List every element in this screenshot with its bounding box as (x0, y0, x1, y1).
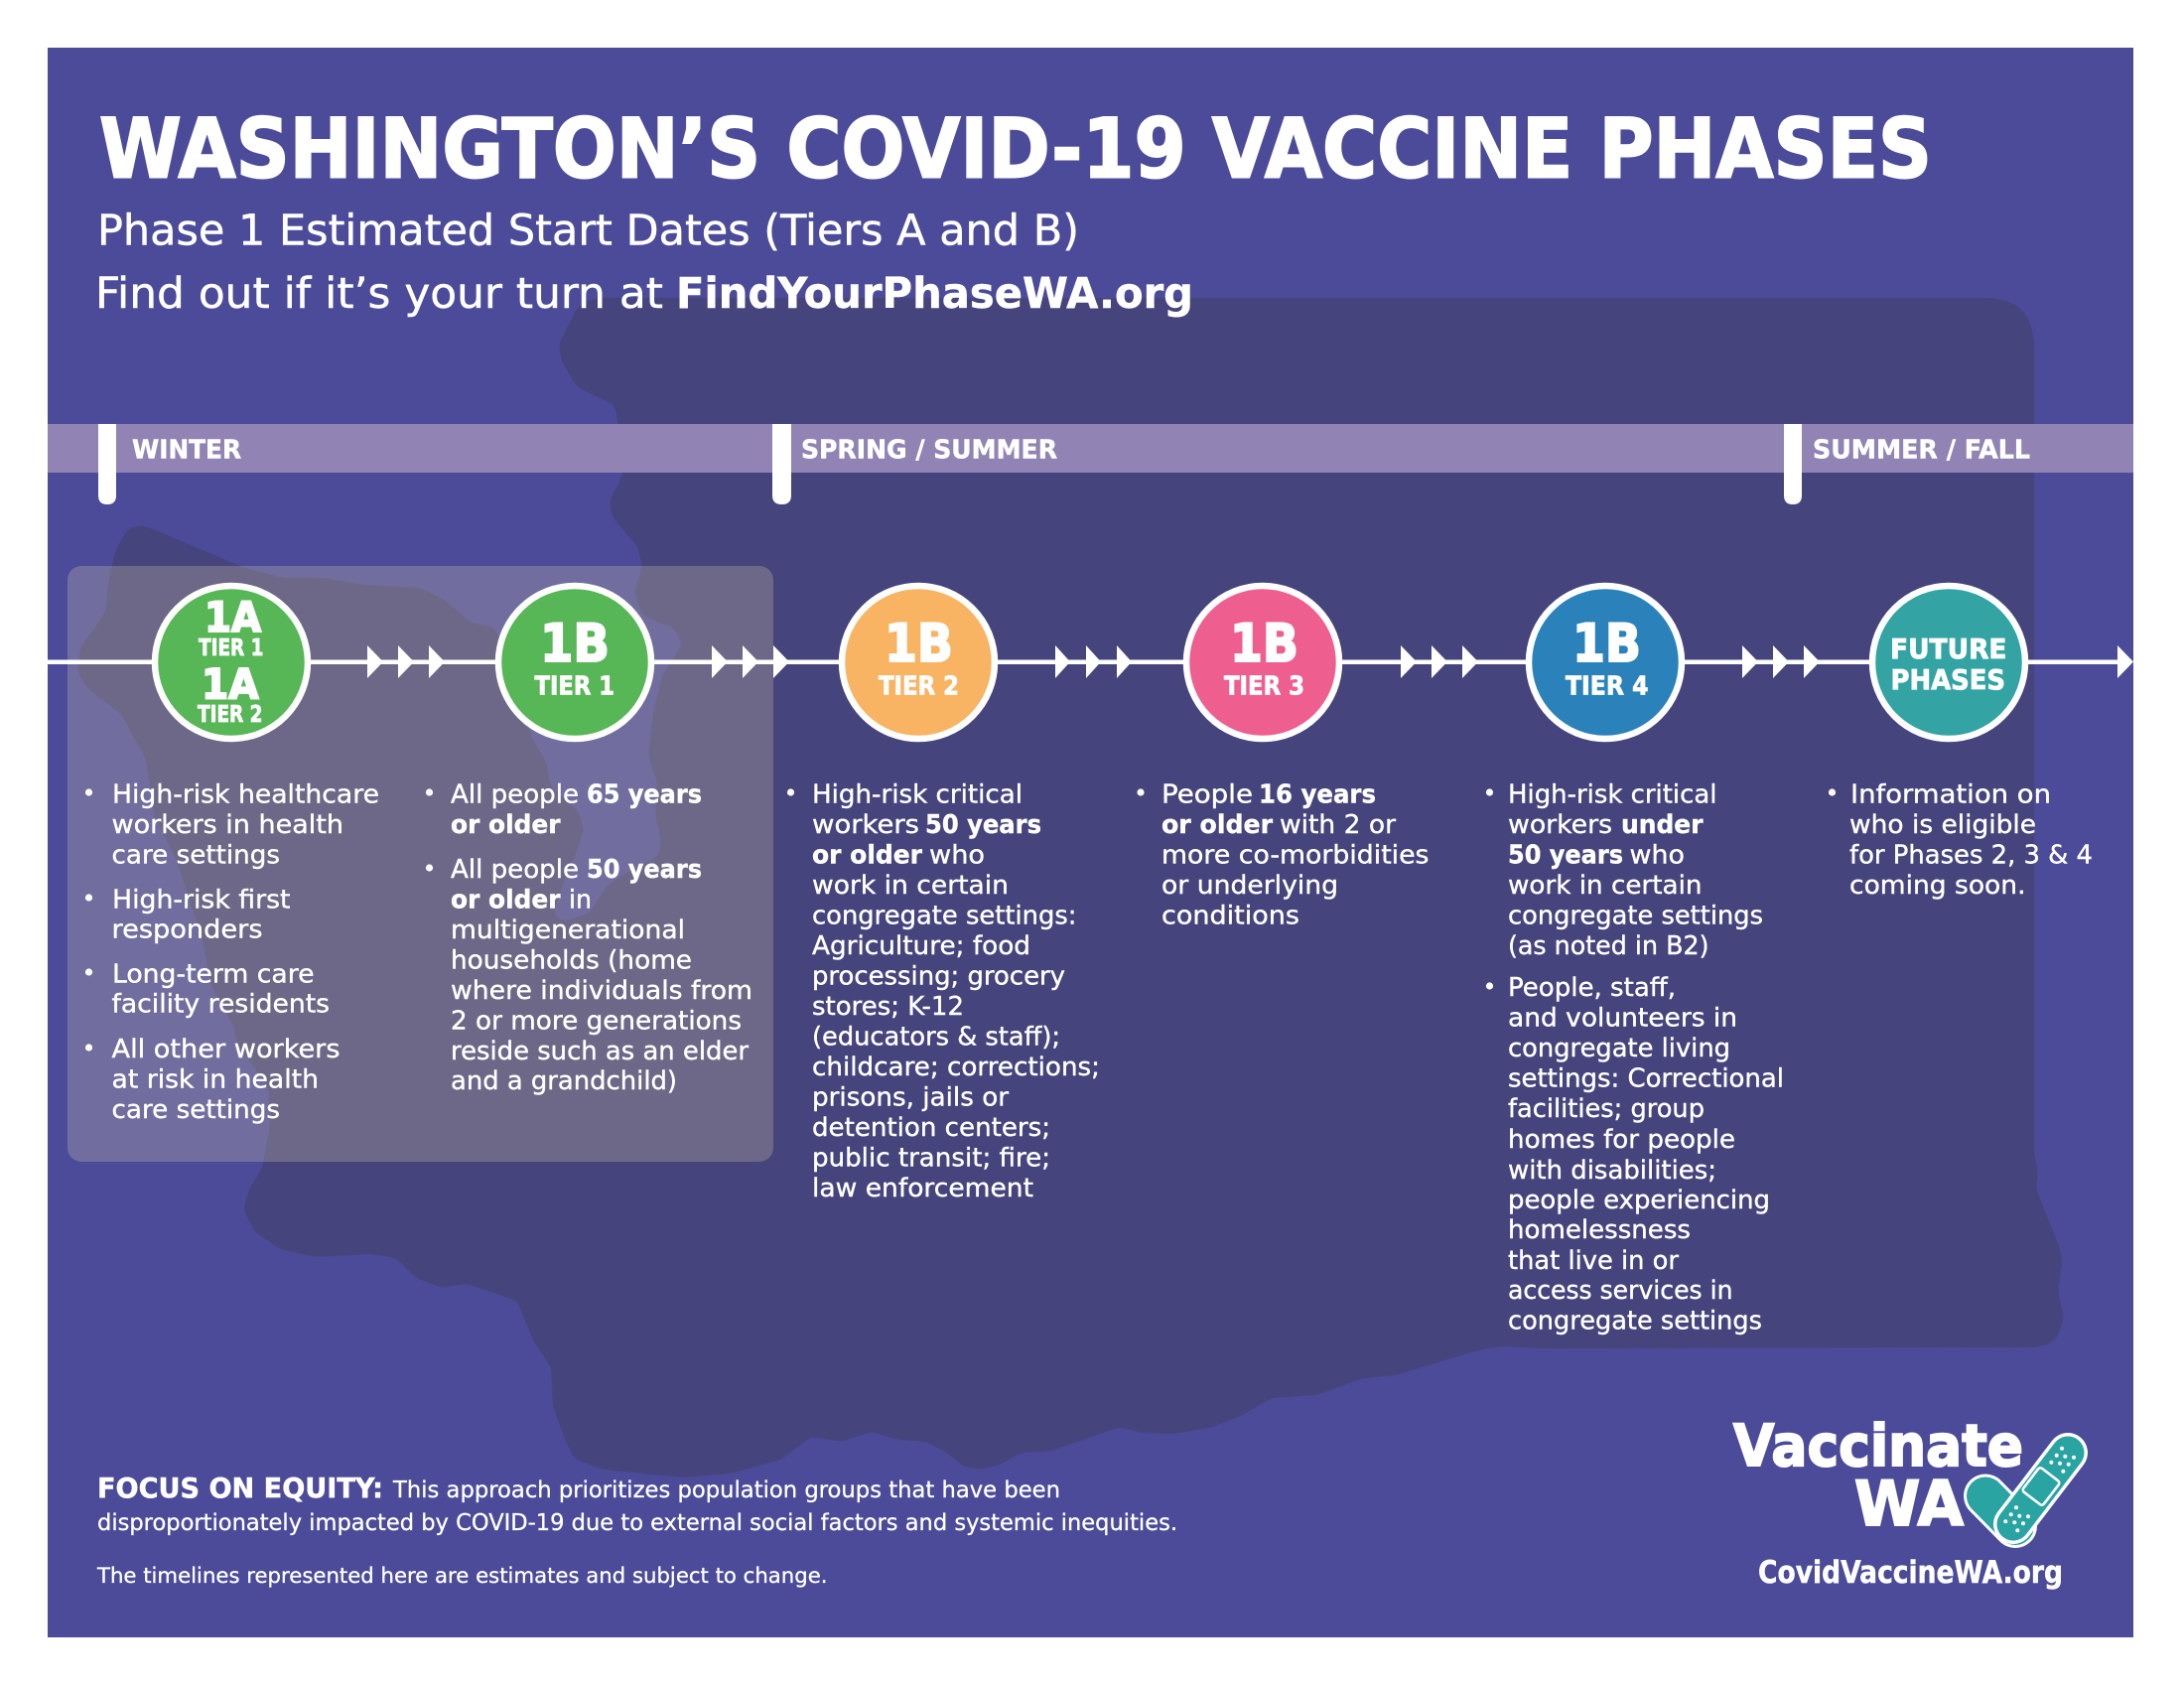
text block: 1B tier 1 eligibility: households (home (451, 945, 692, 975)
text block: 1B tier 1 eligibility: in (569, 886, 592, 915)
text block: 1A eligibility: High-risk healthcare (112, 780, 379, 810)
text block: 1A eligibility: care settings (111, 1095, 280, 1125)
logo: Vaccinate WA: WA (1854, 1468, 1964, 1540)
text block: 1B tier 1 eligibility: multigenerational (451, 915, 685, 945)
text block: 1B tier 3 eligibility: conditions (1161, 902, 1299, 931)
text block: 1B tier 1 eligibility: and a grandchild) (451, 1066, 677, 1096)
icon: bandage check mark (1985, 1447, 2076, 1532)
badge: 1B tier 3: TIER 3 (1224, 671, 1304, 701)
text block: 1B tier 2 eligibility: prisons, jails or (812, 1082, 1009, 1112)
text block: 1B tier 4 eligibility: people experiencing (1508, 1186, 1770, 1215)
season marker: spring / summer (772, 424, 1057, 504)
text block: future phases: who is eligible (1849, 810, 2036, 840)
text block: 1B tier 2 eligibility: (educators & staff); (812, 1023, 1060, 1053)
text block: 1B tier 1 eligibility: or older (451, 810, 561, 840)
text block: future phases (1829, 780, 2093, 901)
text block: 1B tier 2 eligibility: processing; grocery (812, 961, 1065, 991)
footer note: focus on equity: FOCUS ON EQUITY: (97, 1472, 383, 1504)
text block: 1A eligibility (85, 780, 379, 1125)
text block: 1B tier 1 eligibility: reside such as an elder (451, 1037, 749, 1066)
season marker: summer / fall (1784, 424, 2030, 504)
call to action (95, 269, 1193, 319)
text block: future phases: Information on (1850, 780, 2051, 810)
panel: current phases highlight (68, 566, 773, 1162)
text block: 1B tier 4 eligibility: workers (1508, 810, 1612, 840)
text block: 1B tier 4 eligibility: that live in or (1508, 1246, 1679, 1276)
text block: 1B tier 1 eligibility: where individuals from (451, 976, 752, 1006)
text block: 1B tier 2 eligibility: childcare; corrections; (812, 1053, 1100, 1082)
text block: 1A eligibility: High-risk first (112, 886, 290, 915)
text block: 1A eligibility: workers in health (111, 810, 343, 840)
text block: 1A eligibility: Long-term care (112, 959, 314, 989)
text block: 1B tier 1 eligibility: All people (451, 855, 579, 885)
text block: 1B tier 3 eligibility: more co-morbidities (1161, 840, 1430, 870)
call to action: Find out if it’s your turn at (95, 269, 663, 319)
badge: 1B tier 4: 1B (1572, 614, 1641, 674)
text block: 1B tier 3 eligibility: with 2 or (1280, 810, 1396, 840)
footer note: timeline disclaimer: The timelines represented here are estimates and subject to change. (96, 1564, 828, 1588)
badge: 1B tier 3: 1B (1230, 614, 1298, 674)
logo website: CovidVaccineWA.org (1758, 1555, 2063, 1591)
text block: 1B tier 4 eligibility: congregate settings (1508, 902, 1763, 931)
text block: 1B tier 2 eligibility: law enforcement (812, 1174, 1033, 1203)
text block: 1B tier 2 eligibility: or older (812, 840, 922, 870)
badge: 1A tier 1 and 1A tier 2: 1A (205, 593, 261, 641)
text block: 1B tier 4 eligibility: (as noted in B2) (1508, 931, 1709, 961)
text block: 1B tier 1 eligibility: 2 or more generations (451, 1007, 742, 1037)
text block: 1B tier 4 eligibility: settings: Correctional (1508, 1064, 1784, 1094)
text block: 1A eligibility: responders (111, 915, 262, 945)
text block: 1B tier 4 eligibility: congregate living (1508, 1034, 1730, 1063)
text block: 1B tier 4 eligibility (1486, 780, 1784, 1336)
timeline line with arrows (48, 645, 2133, 678)
map: Washington state silhouette (77, 298, 2064, 1477)
text block: 1B tier 1 eligibility: All people (451, 780, 579, 810)
text block: 1A eligibility: All other workers (111, 1035, 340, 1064)
subtitle: Phase 1 Estimated Start Dates (Tiers A and B) (97, 207, 1079, 256)
badge: future phases (1872, 586, 2025, 739)
badge: 1B tier 4: TIER 4 (1566, 671, 1648, 701)
text block: 1B tier 1 eligibility: 50 years (587, 855, 702, 885)
badge: 1A tier 1 and 1A tier 2 (155, 586, 308, 739)
call to action: FindYourPhaseWA.org (676, 269, 1193, 319)
text block: 1B tier 4 eligibility: homelessness (1508, 1215, 1691, 1245)
text block: 1B tier 2 eligibility: who (929, 840, 985, 870)
badge: 1B tier 2: TIER 2 (879, 671, 959, 701)
text block: 1B tier 4 eligibility: work in certain (1508, 871, 1702, 901)
text block: 1B tier 4 eligibility: who (1630, 840, 1685, 870)
text block: 1B tier 4 eligibility: with disabilities; (1508, 1156, 1716, 1186)
season marker: winter (98, 424, 241, 504)
badge: 1B tier 3 (1186, 586, 1339, 739)
text block: future phases: coming soon. (1849, 871, 2025, 901)
text block: 1B tier 2 eligibility: Agriculture; food (812, 931, 1030, 961)
badge: future phases: PHASES (1890, 663, 2005, 696)
text block: 1B tier 4 eligibility: and volunteers in (1508, 1003, 1737, 1033)
text block: 1B tier 4 eligibility: facilities; group (1508, 1094, 1705, 1124)
text block: 1B tier 2 eligibility: stores; K-12 (812, 992, 964, 1022)
text block: 1B tier 4 eligibility: 50 years (1508, 840, 1623, 870)
text block: 1B tier 3 eligibility: or underlying (1161, 871, 1338, 901)
text block: 1B tier 2 eligibility: public transit; fire; (812, 1144, 1050, 1174)
text block: 1B tier 2 eligibility: congregate settings: (812, 902, 1076, 931)
text block: 1B tier 2 eligibility: High-risk critical (812, 780, 1023, 810)
badge: 1B tier 1 (498, 586, 651, 739)
text block: 1B tier 4 eligibility: congregate settings (1508, 1307, 1762, 1336)
footer note: focus on equity (97, 1472, 1177, 1536)
season marker: summer / fall: SUMMER / FALL (1813, 435, 2030, 465)
text block: 1B tier 2 eligibility: work in certain (812, 871, 1009, 901)
badge: 1B tier 2 (842, 586, 995, 739)
text block: 1B tier 4 eligibility: under (1621, 810, 1704, 840)
season marker: spring / summer: SPRING / SUMMER (801, 435, 1057, 465)
text block: 1A eligibility: facility residents (111, 989, 330, 1019)
logo: Vaccinate WA (1733, 1412, 2076, 1540)
footer note: focus on equity: This approach prioritizes population groups that have been (392, 1477, 1060, 1503)
text block: 1B tier 3 eligibility: People (1161, 780, 1253, 810)
season marker: winter: WINTER (132, 435, 241, 465)
text block: 1B tier 4 eligibility: People, staff, (1508, 973, 1676, 1003)
badge: future phases: FUTURE (1890, 633, 2007, 665)
text block: 1A eligibility: at risk in health (111, 1064, 319, 1094)
footer note: focus on equity: disproportionately impacted by COVID-19 due to external social factors and systemic inequities. (97, 1510, 1177, 1536)
text block: future phases: for Phases 2, 3 & 4 (1849, 840, 2093, 870)
text block: 1B tier 1 eligibility (426, 780, 752, 1096)
text block: 1B tier 1 eligibility: or older (451, 886, 561, 915)
title: WASHINGTON’S COVID-19 VACCINE PHASES (99, 101, 1932, 197)
text block: 1A eligibility: care settings (111, 840, 280, 870)
badge: 1B tier 4 (1529, 586, 1682, 739)
badge: 1B tier 2: 1B (885, 614, 953, 674)
badge: 1A tier 1 and 1A tier 2: TIER 2 (198, 702, 262, 728)
text block: 1B tier 2 eligibility: 50 years (925, 810, 1041, 840)
text block: 1B tier 4 eligibility: homes for people (1508, 1125, 1735, 1155)
text block: 1B tier 2 eligibility: detention centers; (812, 1113, 1050, 1143)
text block: 1B tier 3 eligibility: or older (1161, 810, 1273, 840)
season timeline band (48, 424, 2133, 504)
badge: 1B tier 1: 1B (540, 614, 610, 674)
text block: 1B tier 2 eligibility (787, 780, 1100, 1203)
badge: 1A tier 1 and 1A tier 2: TIER 1 (199, 635, 264, 661)
logo: Vaccinate WA: Vaccinate (1733, 1412, 2023, 1479)
text block: 1B tier 1 eligibility: 65 years (587, 780, 702, 810)
badge: 1A tier 1 and 1A tier 2: 1A (202, 659, 259, 709)
text block: 1B tier 4 eligibility: access services in (1508, 1276, 1733, 1306)
badge: 1B tier 1: TIER 1 (534, 671, 614, 701)
text block: 1B tier 2 eligibility: workers (812, 810, 919, 840)
text block: 1B tier 4 eligibility: High-risk critical (1508, 780, 1717, 810)
text block: 1B tier 3 eligibility (1137, 780, 1430, 931)
text block: 1B tier 3 eligibility: 16 years (1259, 780, 1376, 810)
